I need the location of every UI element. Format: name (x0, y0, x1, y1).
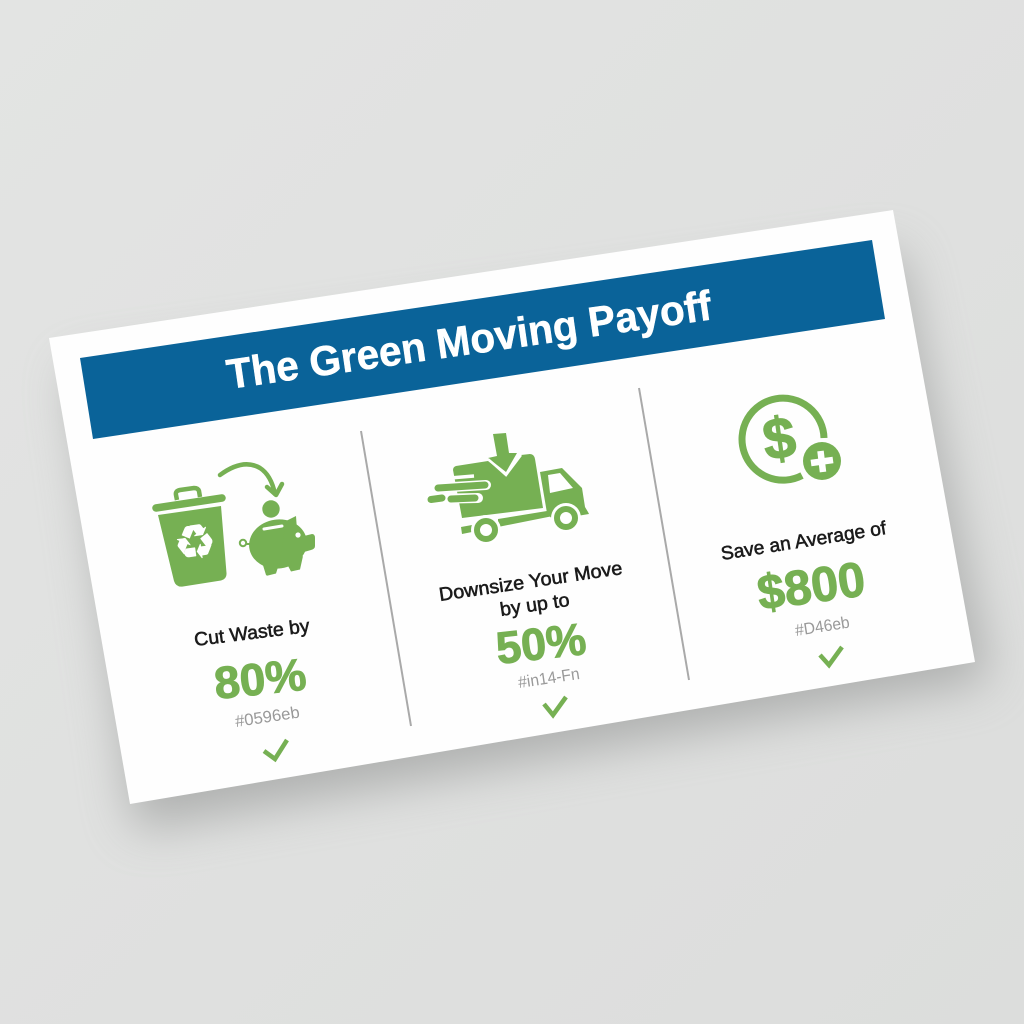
icon: recycling bin (156, 488, 227, 587)
heading: by up to (499, 590, 571, 621)
icon: dollar coin with plus (742, 398, 841, 480)
card (49, 210, 975, 804)
title banner (80, 240, 885, 439)
stat: $800 (754, 552, 868, 621)
icon: delivery truck (428, 433, 589, 545)
icon: dollar coin with plus: $ (759, 404, 800, 473)
icon: recycling bin: ♻ (170, 513, 220, 573)
tag: #D46eb (794, 614, 851, 640)
tag: #in14-Fn (517, 665, 581, 692)
stat: 50% (493, 613, 589, 674)
panel: cut waste (156, 464, 315, 759)
heading: Cut Waste by (193, 616, 311, 651)
heading: Downsize Your Move (438, 558, 624, 606)
stat: 80% (212, 649, 309, 709)
check (820, 647, 842, 665)
panel: downsize (428, 433, 624, 715)
icon: piggy bank (240, 500, 315, 576)
heading: Save an Average of (719, 518, 888, 565)
icon: arrow into piggy bank (220, 464, 282, 495)
divider right (639, 388, 689, 680)
panel: savings (719, 398, 888, 665)
card shadow (70, 250, 990, 830)
check (544, 697, 566, 715)
title: The Green Moving Payoff (224, 282, 715, 398)
tag: #0596eb (234, 704, 301, 731)
check (264, 740, 287, 759)
divider left (361, 431, 411, 726)
